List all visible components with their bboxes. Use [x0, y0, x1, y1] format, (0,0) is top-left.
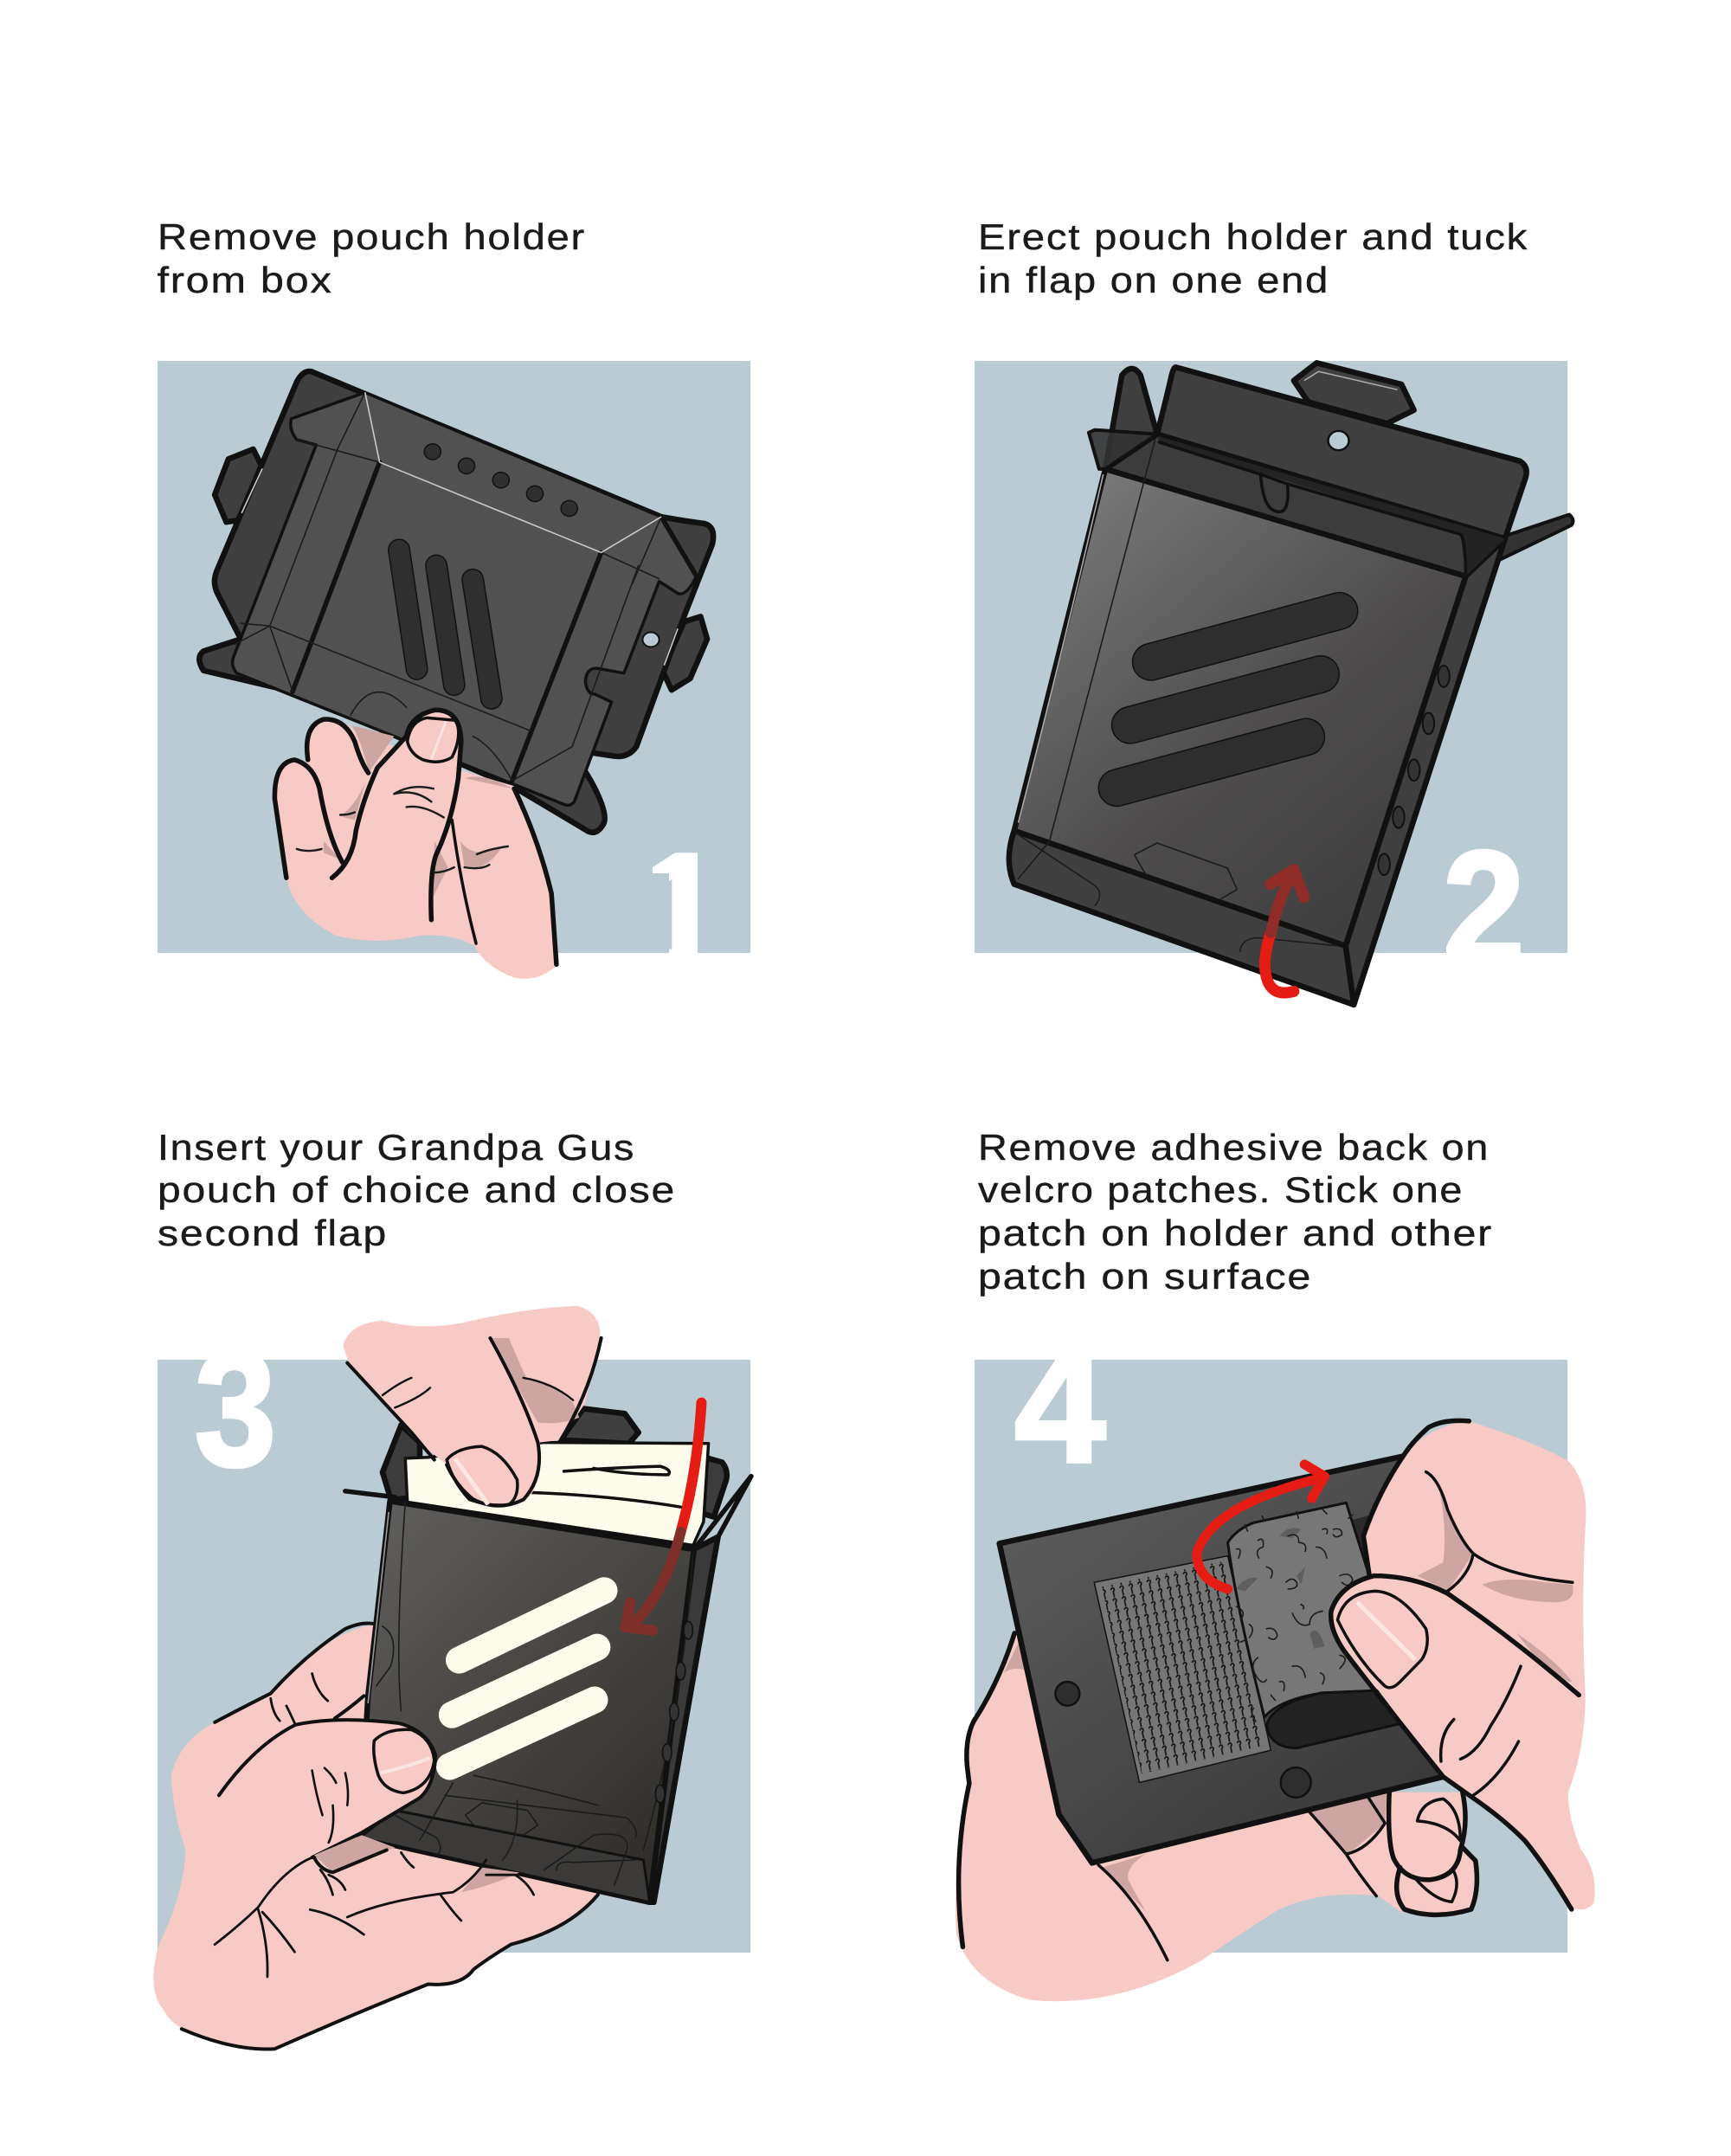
- step 3: [153, 1127, 751, 2049]
- step 1 instruction: from box: [158, 260, 332, 300]
- loop velcro patch: [1228, 1503, 1383, 1722]
- right side holes: [655, 1621, 692, 1803]
- hang hole: [1329, 431, 1348, 450]
- hook velcro square: [1094, 1556, 1271, 1782]
- plate: [1000, 1456, 1443, 1863]
- fingers under the plate: [1310, 1792, 1477, 1915]
- step 3 instruction: pouch of choice and close: [158, 1169, 676, 1210]
- step 4 instruction: Remove adhesive back on: [978, 1127, 1490, 1168]
- main body: [360, 1501, 694, 1902]
- step 1 instruction: [158, 216, 586, 300]
- ears and flap lines: [345, 1477, 751, 1549]
- red arrow: [626, 1403, 701, 1631]
- step 2 instruction: Erect pouch holder and tuck: [978, 216, 1528, 257]
- top tab: [1294, 363, 1414, 423]
- number 1: 1: [636, 821, 728, 1004]
- step 4 instruction: patch on holder and other: [978, 1213, 1493, 1253]
- step 3 instruction: [158, 1127, 676, 1253]
- illustration: holder held by a hand: [199, 371, 713, 979]
- right wall: [650, 1537, 718, 1902]
- red arrow: [1197, 1464, 1325, 1589]
- holes: [424, 444, 577, 517]
- backing tab: [1266, 1690, 1400, 1748]
- holder back sheet: [199, 371, 713, 833]
- back hand: [153, 1624, 598, 2049]
- bottom wall: [1009, 831, 1354, 1005]
- illustration: erected holder: [1009, 363, 1573, 1005]
- step 4 instruction: [978, 1127, 1493, 1297]
- side wall: [1346, 538, 1505, 1005]
- step 3 instruction: Insert your Grandpa Gus: [158, 1127, 635, 1168]
- holder lighter face: [233, 392, 697, 805]
- lower hand outlines: [182, 1623, 598, 2049]
- left hand: [956, 1629, 1477, 2001]
- number 4: 4: [1014, 1314, 1106, 1497]
- hand: [274, 710, 557, 979]
- step 1 instruction: Remove pouch holder: [158, 216, 586, 257]
- step 4 instruction: patch on surface: [978, 1256, 1312, 1297]
- top tab: [561, 1408, 639, 1444]
- left tab: [215, 449, 262, 522]
- left flap: [1089, 430, 1157, 469]
- step 3 blue panel: [158, 1360, 750, 1953]
- slots: [1116, 611, 1339, 788]
- step 2: [975, 216, 1573, 1005]
- bottom lip: [360, 1811, 650, 1902]
- step 2 instruction: [978, 216, 1528, 300]
- back flap: [1157, 367, 1527, 538]
- main face: [1014, 469, 1465, 946]
- step 3 instruction: second flap: [158, 1213, 388, 1253]
- step 1: [158, 216, 750, 1004]
- slots: [399, 550, 492, 698]
- illustration: velcro patch: [956, 1420, 1595, 2001]
- upper hand: [343, 1306, 602, 1507]
- step 1 blue panel: [158, 361, 750, 953]
- pouch: [405, 1443, 709, 1545]
- step 4 instruction: velcro patches. Stick one: [978, 1169, 1464, 1210]
- cream slots: [449, 1591, 604, 1767]
- thumb of lower hand: [219, 1720, 436, 1857]
- right tab: [662, 616, 707, 690]
- right hand: [1331, 1420, 1595, 1909]
- step 2 blue panel: [975, 361, 1567, 953]
- red arrow: [1264, 870, 1304, 993]
- front flap: [1105, 434, 1505, 576]
- illustration: inserting the pouch: [153, 1306, 751, 2049]
- number 2: 2: [1443, 817, 1525, 997]
- hang hole: [642, 633, 660, 647]
- right ear: [1465, 514, 1573, 576]
- step 4 blue panel: [975, 1360, 1567, 1953]
- number 3: 3: [195, 1317, 276, 1501]
- dark strip on plate: [1350, 1514, 1374, 1571]
- flap edge and notch: [1261, 474, 1288, 512]
- back flaps: [383, 1425, 727, 1517]
- holes: [1055, 1682, 1311, 1798]
- side holes: [1378, 666, 1450, 875]
- step 4: [956, 1127, 1595, 2001]
- left ear: [1105, 369, 1157, 469]
- step 2 instruction: in flap on one end: [978, 260, 1329, 300]
